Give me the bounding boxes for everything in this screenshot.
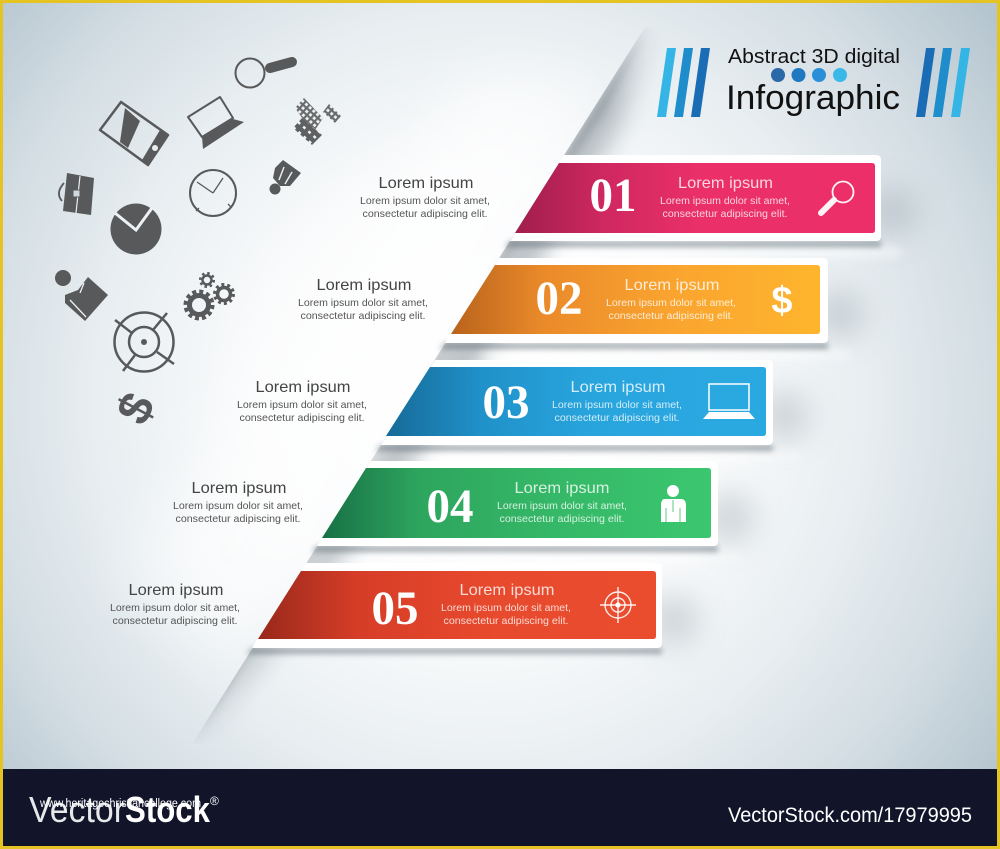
- left text 02: consectetur adipiscing elit.: [300, 310, 426, 322]
- icon: exclamation mark: [270, 160, 301, 194]
- icon: pie chart: [110, 204, 162, 254]
- bar text 01: Lorem ipsum dolor sit amet,: [660, 195, 790, 207]
- left text 04: consectetur adipiscing elit.: [176, 513, 300, 525]
- bar 03: [381, 360, 773, 445]
- bar 05: [252, 563, 662, 648]
- icon: white magnifier: [821, 182, 854, 213]
- bar text 05: Lorem ipsum: [460, 582, 554, 599]
- icon: magnifier: [236, 58, 292, 88]
- left text 02: Lorem ipsum dolor sit amet,: [298, 297, 428, 309]
- bar 02: [445, 258, 828, 343]
- left text 05: consectetur adipiscing elit.: [112, 615, 238, 627]
- fold shadow along the diagonal: [192, 27, 645, 744]
- footer logo: Vector: [29, 789, 125, 830]
- bar text 02: consectetur adipiscing elit.: [608, 310, 734, 322]
- title: second line: Infographic: [726, 79, 900, 117]
- icon: target: [114, 312, 174, 372]
- icon: gears: [186, 273, 234, 318]
- left text 01: Lorem ipsum: [378, 175, 474, 192]
- bar text 02: [606, 277, 736, 322]
- bar text 04: consectetur adipiscing elit.: [500, 513, 624, 525]
- bar 01: [510, 155, 881, 241]
- left text 04: [173, 480, 303, 525]
- title: first line: Abstract 3D digital: [728, 46, 900, 68]
- number 03: 03: [482, 376, 530, 429]
- light streaks and soft shadows around the bars: [246, 188, 916, 654]
- number 05: 05: [372, 582, 418, 635]
- title: right stripes: [916, 48, 970, 117]
- bar text 02: Lorem ipsum: [624, 277, 720, 294]
- icon: laptop: [188, 97, 244, 149]
- left text 03: Lorem ipsum dolor sit amet,: [237, 399, 367, 411]
- bar text 05: [441, 582, 571, 627]
- title: left stripes: [657, 48, 710, 117]
- icon: clock: [190, 170, 236, 216]
- bar text 03: consectetur adipiscing elit.: [554, 412, 680, 424]
- watermark url: www.heritagechristiancollege.com: [39, 798, 201, 810]
- bar text 01: [660, 175, 790, 220]
- bar text 05: consectetur adipiscing elit.: [444, 615, 568, 627]
- bar text 04: Lorem ipsum: [514, 480, 610, 497]
- bar text 04: Lorem ipsum dolor sit amet,: [497, 500, 627, 512]
- left text 02: [298, 277, 428, 322]
- number 02: 02: [536, 272, 582, 325]
- icon: white laptop: [703, 384, 755, 419]
- icon: white person: [661, 485, 686, 522]
- title: dots: [771, 68, 847, 82]
- icon: grid cross: [293, 98, 341, 145]
- left text 01: Lorem ipsum dolor sit amet,: [360, 195, 490, 207]
- bar text 01: Lorem ipsum: [678, 175, 773, 192]
- bar text 05: Lorem ipsum dolor sit amet,: [441, 602, 571, 614]
- icon: dollar: $: [107, 384, 166, 433]
- left text 03: [237, 379, 367, 424]
- white folded triangle glow: [163, 532, 240, 622]
- footer logo: [29, 789, 219, 830]
- bar text 01: consectetur adipiscing elit.: [662, 208, 788, 220]
- left text 04: Lorem ipsum dolor sit amet,: [173, 500, 303, 512]
- left text 01: [360, 175, 490, 220]
- icon: briefcase: [59, 173, 94, 215]
- bar text 03: Lorem ipsum: [570, 379, 666, 396]
- number 04: 04: [426, 480, 474, 533]
- bar text 02: Lorem ipsum dolor sit amet,: [606, 297, 736, 309]
- left text 05: Lorem ipsum: [128, 582, 224, 599]
- bar text 04: [497, 480, 627, 525]
- left text 02: Lorem ipsum: [316, 277, 412, 294]
- bar 04: [317, 461, 718, 546]
- footer logo: Stock: [125, 789, 211, 830]
- left text 03: Lorem ipsum: [256, 379, 350, 396]
- left text 04: Lorem ipsum: [192, 480, 286, 497]
- icon: person: [55, 270, 108, 321]
- bar text 03: Lorem ipsum dolor sit amet,: [552, 399, 682, 411]
- left text 05: [110, 582, 240, 627]
- footer stock id: VectorStock.com/17979995: [728, 804, 972, 827]
- left text 03: consectetur adipiscing elit.: [240, 412, 364, 424]
- icon: white target: [600, 587, 636, 623]
- left text 05: Lorem ipsum dolor sit amet,: [110, 602, 240, 614]
- footer band: [0, 769, 1000, 849]
- icon: smartphone: [100, 102, 168, 165]
- bar text 03: [552, 379, 682, 424]
- left text 01: consectetur adipiscing elit.: [362, 208, 488, 220]
- footer logo: ®: [210, 794, 219, 808]
- icon: white dollar: $: [771, 280, 793, 322]
- number 01: 01: [590, 169, 636, 222]
